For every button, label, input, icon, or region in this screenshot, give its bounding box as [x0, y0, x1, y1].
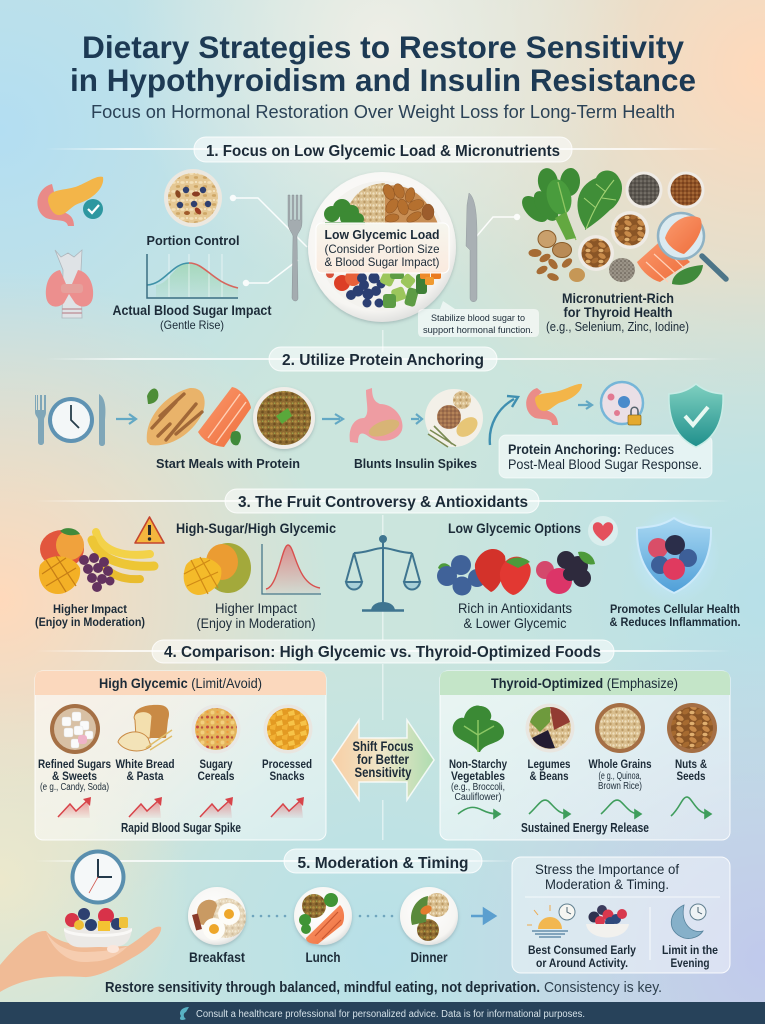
callout: protein anchoring [499, 435, 712, 478]
label: rich in antioxidants: Rich in Antioxidants [458, 601, 572, 616]
label: white bread [116, 757, 174, 783]
icon: disclaimer leaf [180, 1007, 189, 1020]
icon: mango [184, 543, 251, 595]
label: nuts and seeds [675, 757, 707, 783]
panel heading: Thyroid-Optimized (Emphasize) [491, 675, 678, 691]
label: non-starchy vegetables: (e.g., Broccoli, [451, 782, 505, 793]
icon: plate of food [308, 172, 456, 322]
icon: wall clock [70, 850, 126, 904]
icon: digested food [425, 389, 483, 447]
icon: berry bowl [586, 905, 629, 938]
icon: high sugar fruits [39, 528, 154, 594]
heading: section 3 [225, 489, 539, 513]
label: best consumed early [528, 943, 636, 970]
icon: pancreas [526, 384, 582, 425]
icons: red spike arrows [58, 797, 304, 818]
label: higher impact bold: Higher Impact [53, 602, 127, 616]
arrow: shift focus: Sensitivity [354, 765, 412, 780]
label: non-starchy vegetables: Non-Starchy [449, 757, 507, 771]
connector dots [252, 915, 393, 917]
label: rapid blood sugar spike: Rapid Blood Sugar Spike [121, 821, 241, 835]
callout: stabilize blood sugar: Stabilize blood sugar to [431, 313, 525, 324]
panel heading [535, 862, 679, 892]
arrow [471, 909, 495, 923]
label: blunts insulin spikes: Blunts Insulin Spikes [354, 456, 477, 471]
label: higher impact regular: Higher Impact [215, 601, 297, 616]
heading: section 2 [269, 347, 497, 371]
label: sustained energy release: Sustained Energy Release [521, 821, 649, 835]
icon: dinner plate [400, 887, 458, 945]
label: portion control: Portion Control [146, 233, 240, 248]
icon: stomach [350, 388, 402, 443]
label: low glycemic load: (Consider Portion Size [324, 242, 440, 256]
labels: meals [189, 950, 448, 965]
section 1: low glycemic load and micronutrients [37, 137, 726, 337]
icon: fork [288, 195, 302, 301]
panel heading: Moderation & Timing. [545, 877, 669, 892]
icons: green gentle curves [458, 797, 711, 818]
label: low glycemic load: Low Glycemic Load [324, 227, 440, 242]
label: non-starchy vegetables: Cauliflower) [454, 792, 502, 803]
arrow: shift focus: Shift Focus [352, 739, 414, 754]
heading: section 4: 4. Comparison: High Glycemic vs. Thyroid-Optimized Foods [164, 644, 601, 661]
arrow [116, 414, 136, 424]
label: processed snacks [262, 757, 312, 783]
heading: section 1: 1. Focus on Low Glycemic Load & Micronutrients [206, 143, 560, 160]
panel: high glycemic foods [35, 671, 326, 840]
labels: meals: Lunch [306, 950, 340, 965]
callout: protein anchoring: Post-Meal Blood Sugar Response. [508, 457, 702, 472]
icon: processed snacks [264, 704, 312, 754]
title [70, 29, 696, 98]
section 4: comparison [35, 640, 731, 840]
icon: refined sugars [50, 704, 100, 754]
label: promotes cellular health: & Reduces Inflammation. [610, 615, 740, 629]
heading: section 2: 2. Utilize Protein Anchoring [282, 352, 484, 369]
label: whole grains: (e g., Quinoa, [598, 771, 642, 782]
label: legumes: & Beans [530, 769, 569, 783]
label: refined sugars [38, 757, 111, 793]
label: whole grains: Whole Grains [588, 757, 652, 771]
icon: clock with cutlery [35, 394, 105, 446]
icon: cell with lock [601, 382, 643, 425]
arrow: curved up to pancreas [490, 396, 518, 445]
label: legumes: Legumes [528, 757, 571, 771]
label: low glycemic load: & Blood Sugar Impact) [324, 255, 440, 269]
label: white bread: White Bread [116, 757, 174, 771]
chart: gentle blood sugar rise [147, 254, 238, 298]
label: sugary cereals: Cereals [198, 769, 235, 783]
icon: hand holding fruit bowl [0, 908, 161, 992]
icon: sunrise with clock [527, 904, 575, 937]
icon: warning triangle [135, 517, 164, 543]
callout: stabilize blood sugar: support hormonal function. [423, 325, 533, 336]
icon: antioxidant shield [628, 508, 720, 604]
icon: sugary cereals [192, 704, 240, 754]
label: low glycemic load [316, 223, 449, 273]
icon: leafy vegetables [453, 706, 504, 752]
label: sugary cereals: Sugary [200, 757, 233, 771]
icon: breakfast plate [188, 887, 246, 945]
arrow [411, 414, 422, 424]
label: non-starchy vegetables: Vegetables [451, 769, 505, 783]
label: higher impact regular [196, 601, 316, 631]
label: refined sugars: (e g., Candy, Soda) [40, 782, 109, 793]
icon: check shield [669, 384, 723, 447]
panel: moderation and timing [512, 857, 730, 973]
callout: protein anchoring: Protein Anchoring: Reduces [508, 442, 674, 457]
icon: berries [437, 549, 595, 596]
arrow [322, 414, 343, 424]
label: nuts and seeds: Seeds [676, 769, 706, 783]
label: limit in the evening: Limit in the [662, 943, 718, 957]
icon: legumes [526, 704, 574, 752]
icon: pancreas with check [37, 177, 103, 226]
label: micronutrient-rich: Micronutrient-Rich [562, 290, 674, 306]
label: limit in the evening [662, 943, 718, 970]
label: higher impact bold [35, 602, 145, 629]
labels: meals: Dinner [410, 950, 448, 965]
arrow [578, 401, 592, 409]
section 5: moderation and timing [0, 849, 730, 996]
label: micronutrient-rich [546, 290, 689, 334]
label: promotes cellular health: Promotes Cellular Health [610, 602, 740, 616]
label: higher impact bold: (Enjoy in Moderation) [35, 615, 145, 629]
label: start meals with protein: Start Meals with Protein [156, 456, 300, 471]
label: processed snacks: Processed [262, 757, 312, 771]
section 3: fruit and antioxidants [35, 489, 740, 631]
icon: nuts and seeds [667, 703, 717, 753]
closing message: Restore sensitivity through balanced, mindful eating, not deprivation. [105, 980, 540, 996]
label: sugary cereals [198, 757, 235, 783]
arrow: shift focus: for Better [357, 752, 410, 767]
icon: grilled chicken [147, 388, 205, 445]
icon: balance scale [346, 536, 420, 610]
label: white bread: & Pasta [126, 769, 164, 783]
arrow: shift focus [332, 720, 434, 800]
label: refined sugars: & Sweets [52, 769, 97, 783]
icon: oatmeal bowl [164, 169, 222, 227]
label: rich in antioxidants: & Lower Glycemic [464, 616, 567, 631]
icon: salmon [198, 387, 251, 447]
label: rich in antioxidants [458, 601, 572, 631]
label: whole grains [588, 757, 652, 792]
panel heading: Stress the Importance of [535, 862, 679, 877]
label: best consumed early: or Around Activity. [536, 956, 628, 970]
label: nuts and seeds: Nuts & [675, 757, 707, 771]
heading: section 1 [194, 137, 572, 162]
label: best consumed early: Best Consumed Early [528, 943, 636, 957]
label: higher impact regular: (Enjoy in Moderation) [196, 616, 316, 631]
callout: stabilize blood sugar [418, 301, 539, 337]
icon: knife [466, 193, 477, 302]
icon: micronutrient foods [517, 166, 726, 285]
icon: white bread [118, 705, 172, 751]
section 2: protein anchoring [35, 347, 723, 478]
label: actual blood sugar impact: (Gentle Rise) [160, 318, 224, 332]
icon: lentil bowl [253, 387, 315, 449]
icon: whole grains [595, 703, 645, 753]
label: non-starchy vegetables [449, 757, 507, 803]
icon: moon with clock [671, 904, 706, 939]
label: promotes cellular health [610, 602, 740, 629]
label: legumes [528, 757, 571, 783]
panel heading: High Glycemic (Limit/Avoid) [99, 675, 262, 691]
icon: thyroid [46, 250, 93, 318]
label: micronutrient-rich: (e.g., Selenium, Zinc, Iodine) [546, 320, 689, 334]
footer bar [0, 1002, 765, 1024]
connectors to plate [230, 196, 520, 286]
subtitle: Focus on Hormonal Restoration Over Weight Loss for Long-Term Health [91, 101, 675, 122]
heading: high sugar / high glycemic: High-Sugar/High Glycemic [176, 521, 336, 536]
label: micronutrient-rich: for Thyroid Health [564, 304, 672, 320]
label: limit in the evening: Evening [670, 956, 710, 970]
title: in Hypothyroidism and Insulin Resistance [70, 62, 696, 98]
heading: low glycemic options: Low Glycemic Options [448, 521, 581, 536]
label: actual blood sugar impact [112, 303, 272, 332]
heading: section 5: 5. Moderation & Timing [298, 855, 468, 872]
label: processed snacks: Snacks [270, 769, 305, 783]
label: whole grains: Brown Rice) [598, 781, 642, 792]
title: Dietary Strategies to Restore Sensitivity [82, 29, 684, 65]
icon: heart [588, 516, 618, 546]
chart: rapid glucose spike [262, 544, 321, 594]
closing message: Consistency is key. [544, 980, 662, 996]
label: actual blood sugar impact: Actual Blood Sugar Impact [112, 303, 272, 318]
heading: section 3: 3. The Fruit Controversy & Antioxidants [238, 494, 528, 511]
heading: section 5 [284, 849, 482, 873]
panel: thyroid optimized foods [440, 671, 730, 840]
icon: lunch plate [294, 887, 352, 945]
label: refined sugars: Refined Sugars [38, 757, 111, 771]
labels: meals: Breakfast [189, 950, 245, 965]
disclaimer text: Consult a healthcare professional for personalized advice. Data is for informational purposes. [196, 1009, 585, 1020]
